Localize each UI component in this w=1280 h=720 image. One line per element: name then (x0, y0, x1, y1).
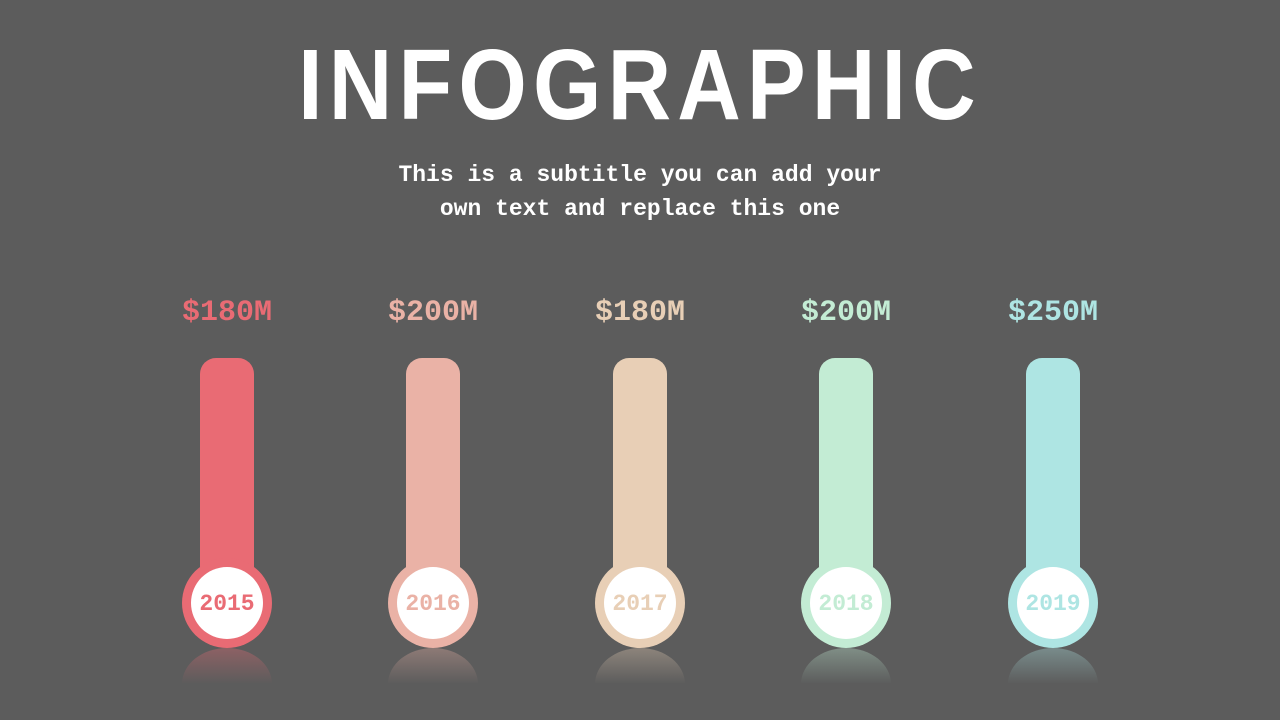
circle 2017 (595, 558, 685, 648)
item: 2017 (595, 296, 685, 678)
bar 2018 (819, 358, 873, 588)
reflection 2016 (388, 648, 478, 684)
subtitle: own text and replace this one (440, 196, 840, 222)
bar 2015 (200, 358, 254, 588)
circle 2017: 2017 (612, 591, 668, 617)
bar 2017 (613, 358, 667, 588)
value 2019: $250M (1008, 296, 1098, 330)
subtitle (398, 162, 882, 222)
title: INFOGRAPHIC (298, 29, 982, 141)
bar 2016 (406, 358, 460, 588)
reflection 2018 (801, 648, 891, 684)
value 2018: $200M (801, 296, 891, 330)
reflection 2015 (182, 648, 272, 684)
bar 2019 (1026, 358, 1080, 588)
item: 2016 (388, 296, 478, 678)
circle 2018 (801, 558, 891, 648)
item: 2015 (182, 296, 272, 678)
circle 2015: 2015 (199, 591, 255, 617)
reflection 2019 (1008, 648, 1098, 684)
circle 2016: 2016 (405, 591, 461, 617)
circle 2015 (182, 558, 272, 648)
item: 2018 (801, 296, 891, 678)
value 2015: $180M (182, 296, 272, 330)
circle 2019: 2019 (1025, 591, 1081, 617)
subtitle: This is a subtitle you can add your (398, 162, 882, 188)
item: 2019 (1008, 296, 1098, 678)
value 2017: $180M (595, 296, 685, 330)
circle 2016 (388, 558, 478, 648)
reflection 2017 (595, 648, 685, 684)
circle 2018: 2018 (818, 591, 874, 617)
circle 2019 (1008, 558, 1098, 648)
value 2016: $200M (388, 296, 478, 330)
